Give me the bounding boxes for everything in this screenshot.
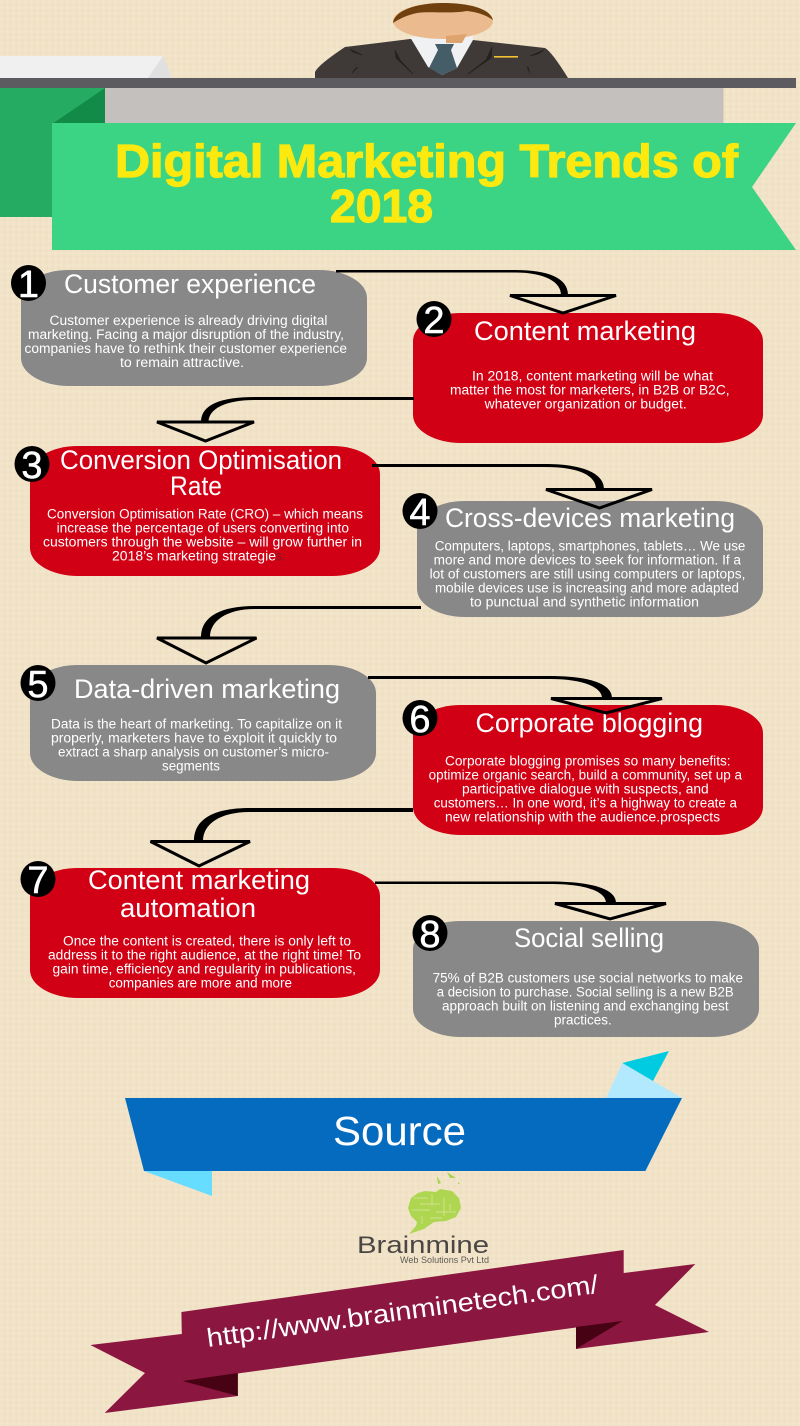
number badge 8	[412, 914, 448, 956]
body text: extract a sharp analysis on customer’s micro-	[58, 744, 329, 759]
ribbon fold shadow	[52, 88, 105, 124]
body text: participative dialogue with suspects, and	[462, 781, 709, 796]
body text: whatever organization or budget.	[484, 397, 687, 412]
title ribbon	[0, 88, 796, 250]
number badge 1	[11, 264, 46, 306]
ribbon fold top right cyan	[622, 1051, 669, 1081]
icon: paper on desk	[0, 56, 172, 78]
logo wordmark: Brainmine	[357, 1232, 489, 1259]
body text: Customer experience is already driving digital	[50, 313, 328, 328]
panel: 8 social selling	[413, 921, 759, 1037]
body text: customers through the website – will grow further in	[43, 535, 362, 550]
ribbon front	[52, 123, 796, 250]
body text: matter the most for marketers, in B2B or B2C,	[450, 383, 730, 398]
number badge 2	[416, 300, 452, 342]
number badge 3	[14, 445, 50, 487]
body text: gain time, efficiency and regularity in publications,	[52, 962, 356, 977]
number badge 1: 1	[18, 264, 39, 306]
heading: Content marketing	[474, 316, 696, 346]
number badge 3: 3	[21, 445, 43, 487]
panel: 3 conversion optimisation rate	[30, 445, 380, 576]
url ribbon	[90, 1250, 709, 1413]
body text: Data is the heart of marketing. To capitalize on it	[51, 716, 342, 731]
icon: shirt collar	[410, 35, 473, 75]
desk top	[0, 78, 796, 88]
arrow: 6 to 7	[150, 808, 413, 866]
body text: s.	[276, 549, 285, 564]
number badge 6	[402, 699, 438, 741]
icon: lapel folds	[350, 47, 544, 74]
body text: 75% of B2B customers use social networks to make	[433, 971, 743, 986]
heading: Conversion Optimisation	[60, 445, 342, 475]
body text: Computers, laptops, smartphones, tablets… We use	[435, 539, 745, 554]
body text: properly, marketers have to exploit it quickly to	[51, 730, 337, 745]
heading: Content marketing	[88, 865, 310, 895]
number badge 5	[20, 664, 56, 706]
arrow: 4 to 5	[157, 606, 421, 663]
body text: lot of customers are still using computers or laptops,	[430, 567, 745, 582]
source ribbon	[125, 1051, 682, 1196]
ribbon fold top right light	[606, 1063, 682, 1098]
body text: 2018’s marketing strategie	[112, 549, 276, 564]
body text: to remain attractive.	[120, 355, 244, 370]
right tail	[576, 1264, 709, 1349]
body text: more and more devices to seek for information. If a	[434, 553, 741, 568]
arrow: 3 to 4	[372, 464, 652, 508]
illustration: businessman behind desk	[315, 3, 568, 78]
body text: address it to the right audience, at the right time! To	[48, 948, 361, 963]
body text: approach built on listening and exchanging best	[442, 999, 729, 1014]
body text: practices.	[554, 1013, 612, 1028]
panel: 4 cross-devices marketing	[417, 501, 763, 617]
number badge 4: 4	[409, 492, 431, 534]
heading: automation	[120, 893, 256, 923]
ribbon back fold	[0, 88, 105, 217]
title: 2018	[330, 180, 433, 232]
left tail	[90, 1334, 238, 1413]
number badge 6: 6	[409, 699, 431, 741]
arrow: 5 to 6	[368, 676, 662, 713]
icon: green speech-bubble brain	[408, 1172, 461, 1234]
arrow: 7 to 8	[375, 882, 666, 919]
number badge 8: 8	[419, 914, 441, 956]
body text: Conversion Optimisation Rate (CRO) – which means	[47, 507, 363, 522]
number badge 7	[20, 860, 56, 902]
logo: brainmine	[357, 1172, 489, 1265]
body text: companies have to rethink their customer experience	[24, 341, 347, 356]
icon: tie	[429, 44, 457, 75]
body text: segments	[162, 758, 220, 773]
body text: to punctual and synthetic information	[470, 595, 699, 610]
logo tagline: Web Solutions Pvt Ltd	[400, 1255, 489, 1265]
title: Digital Marketing Trends of	[115, 135, 739, 187]
number badge 5: 5	[27, 664, 49, 706]
ribbon fold bottom left	[144, 1171, 212, 1196]
panel: 2 content marketing	[413, 313, 763, 443]
icon: face	[393, 3, 493, 39]
body text: In 2018, content marketing will be what	[472, 369, 713, 384]
source label: Source	[333, 1108, 466, 1154]
heading: Rate	[170, 471, 222, 501]
arrow: 1 to 2	[336, 270, 616, 313]
body text: Corporate blogging promises so many benefits:	[445, 753, 731, 768]
icon: man's suit	[315, 39, 568, 78]
icon: neck shadow	[446, 34, 467, 43]
heading: Customer experience	[64, 269, 316, 299]
body text: companies are more and more	[109, 976, 292, 991]
body text: increase the percentage of users converting into	[57, 521, 349, 536]
url text: http://www.brainminetech.com/	[205, 1269, 601, 1353]
body text: mobile devices use is increasing and more adapted	[435, 581, 739, 596]
icon: hair	[393, 3, 493, 23]
arrow: 2 to 3	[157, 397, 414, 441]
body text: optimize organic search, build a community, set up a	[429, 767, 742, 782]
heading: Cross-devices marketing	[445, 503, 735, 533]
main band	[181, 1250, 624, 1381]
number badge 2: 2	[423, 300, 445, 342]
panel: 1 customer experience	[21, 269, 367, 386]
body text: a decision to purchase. Social selling is a new B2B	[437, 985, 734, 1000]
number badge 7: 7	[27, 860, 49, 902]
ribbon front	[125, 1098, 682, 1171]
panel: 5 data-driven marketing	[30, 665, 376, 781]
panel: 6 corporate blogging	[413, 705, 763, 835]
body text: customers… In one word, it’s a highway to create a	[434, 795, 737, 810]
desk front	[105, 88, 724, 124]
body text: marketing. Facing a major disruption of the industry,	[28, 327, 344, 342]
panel: 7 content marketing automation	[30, 865, 380, 998]
heading: Data-driven marketing	[74, 674, 340, 704]
left fold shadow	[183, 1373, 238, 1396]
right fold shadow	[576, 1321, 622, 1349]
number badge 4	[402, 492, 438, 534]
body text: Once the content is created, there is only left to	[63, 934, 351, 949]
heading: Corporate blogging	[476, 708, 703, 738]
icon: pocket pen	[494, 56, 518, 58]
body text: new relationship with the audience.prospects	[445, 809, 720, 824]
heading: Social selling	[514, 923, 664, 953]
